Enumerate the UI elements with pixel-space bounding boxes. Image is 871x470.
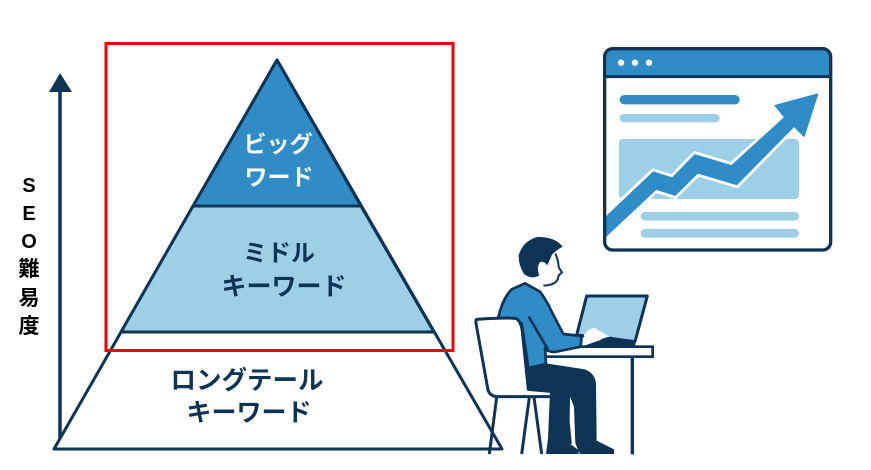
- icon: browser window with growth chart: [602, 49, 831, 250]
- tier: long tail keywords: キーワード: [186, 399, 312, 427]
- axis label: E: [22, 203, 36, 225]
- keyword pyramid: [54, 60, 502, 449]
- tier: middle keywords: [121, 206, 434, 332]
- hand: [584, 328, 609, 343]
- axis label: 難: [18, 258, 40, 281]
- y axis: SEO difficulty: [18, 73, 72, 440]
- tier: long tail keywords: [54, 60, 502, 449]
- trousers and shoes: [526, 363, 614, 454]
- text bars: [641, 212, 799, 238]
- browser body: [605, 49, 831, 250]
- hair: [519, 237, 563, 277]
- shirt: [498, 283, 582, 368]
- tier: middle keywords: キーワード: [221, 273, 347, 301]
- axis label: S: [22, 175, 36, 197]
- browser title bar: [605, 50, 830, 77]
- chair seat and back: [476, 318, 564, 397]
- neck and face: [527, 249, 562, 291]
- axis label: [18, 175, 40, 338]
- chair legs: [489, 397, 570, 454]
- chart area: [619, 139, 799, 199]
- sleeve line: [529, 318, 547, 348]
- tier: middle keywords: ミドル: [243, 240, 315, 267]
- tier: big words: [193, 60, 361, 206]
- axis label: 度: [18, 315, 40, 338]
- red highlight frame: [106, 44, 453, 350]
- tier: long tail keywords: ロングテール: [170, 366, 324, 395]
- axis label: 易: [18, 287, 40, 310]
- browser border: [605, 49, 831, 250]
- growth arrow: [602, 94, 817, 240]
- laptop: [577, 296, 647, 347]
- axis arrow: [49, 73, 72, 440]
- tier: big words: ワード: [244, 164, 314, 190]
- axis label: O: [21, 231, 37, 253]
- headline bars: [620, 95, 740, 122]
- illustration: person working on a laptop: [476, 237, 653, 454]
- tier: big words: ビッグ: [244, 131, 312, 157]
- desk: [545, 347, 653, 454]
- face profile line: [543, 253, 562, 286]
